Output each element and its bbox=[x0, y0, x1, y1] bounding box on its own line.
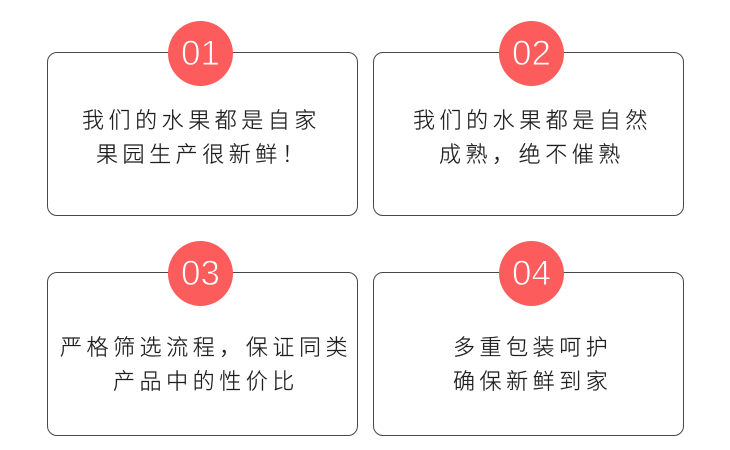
number badge 04 bbox=[499, 241, 564, 306]
panel: card 02 bbox=[373, 21, 684, 216]
text: card 04 line 2: 确保新鲜到家 bbox=[453, 369, 612, 394]
text: card 03 line 2: 产品中的性价比 bbox=[113, 369, 299, 394]
number badge 02: 02 bbox=[512, 34, 551, 73]
text: card 01 line 1: 我们的水果都是自家 bbox=[82, 108, 321, 133]
panel: card 04 bbox=[373, 241, 684, 436]
number badge 02 bbox=[499, 21, 564, 86]
number badge 04: 04 bbox=[512, 254, 551, 293]
number badge 01: 01 bbox=[181, 34, 220, 73]
panel: card 01 bbox=[47, 21, 358, 216]
text: card 01 line 2: 果园生产很新鲜！ bbox=[96, 142, 308, 167]
number badge 03 bbox=[168, 241, 233, 306]
number badge 03: 03 bbox=[181, 254, 220, 293]
number badge 01 bbox=[168, 21, 233, 86]
text: card 02 line 1: 我们的水果都是自然 bbox=[413, 108, 652, 133]
text: card 03 line 1: 严格筛选流程，保证同类 bbox=[60, 335, 352, 360]
text: card 04 line 1: 多重包装呵护 bbox=[453, 335, 612, 360]
text: card 02 line 2: 成熟，绝不催熟 bbox=[439, 142, 625, 167]
panel: card 03 bbox=[47, 241, 358, 436]
